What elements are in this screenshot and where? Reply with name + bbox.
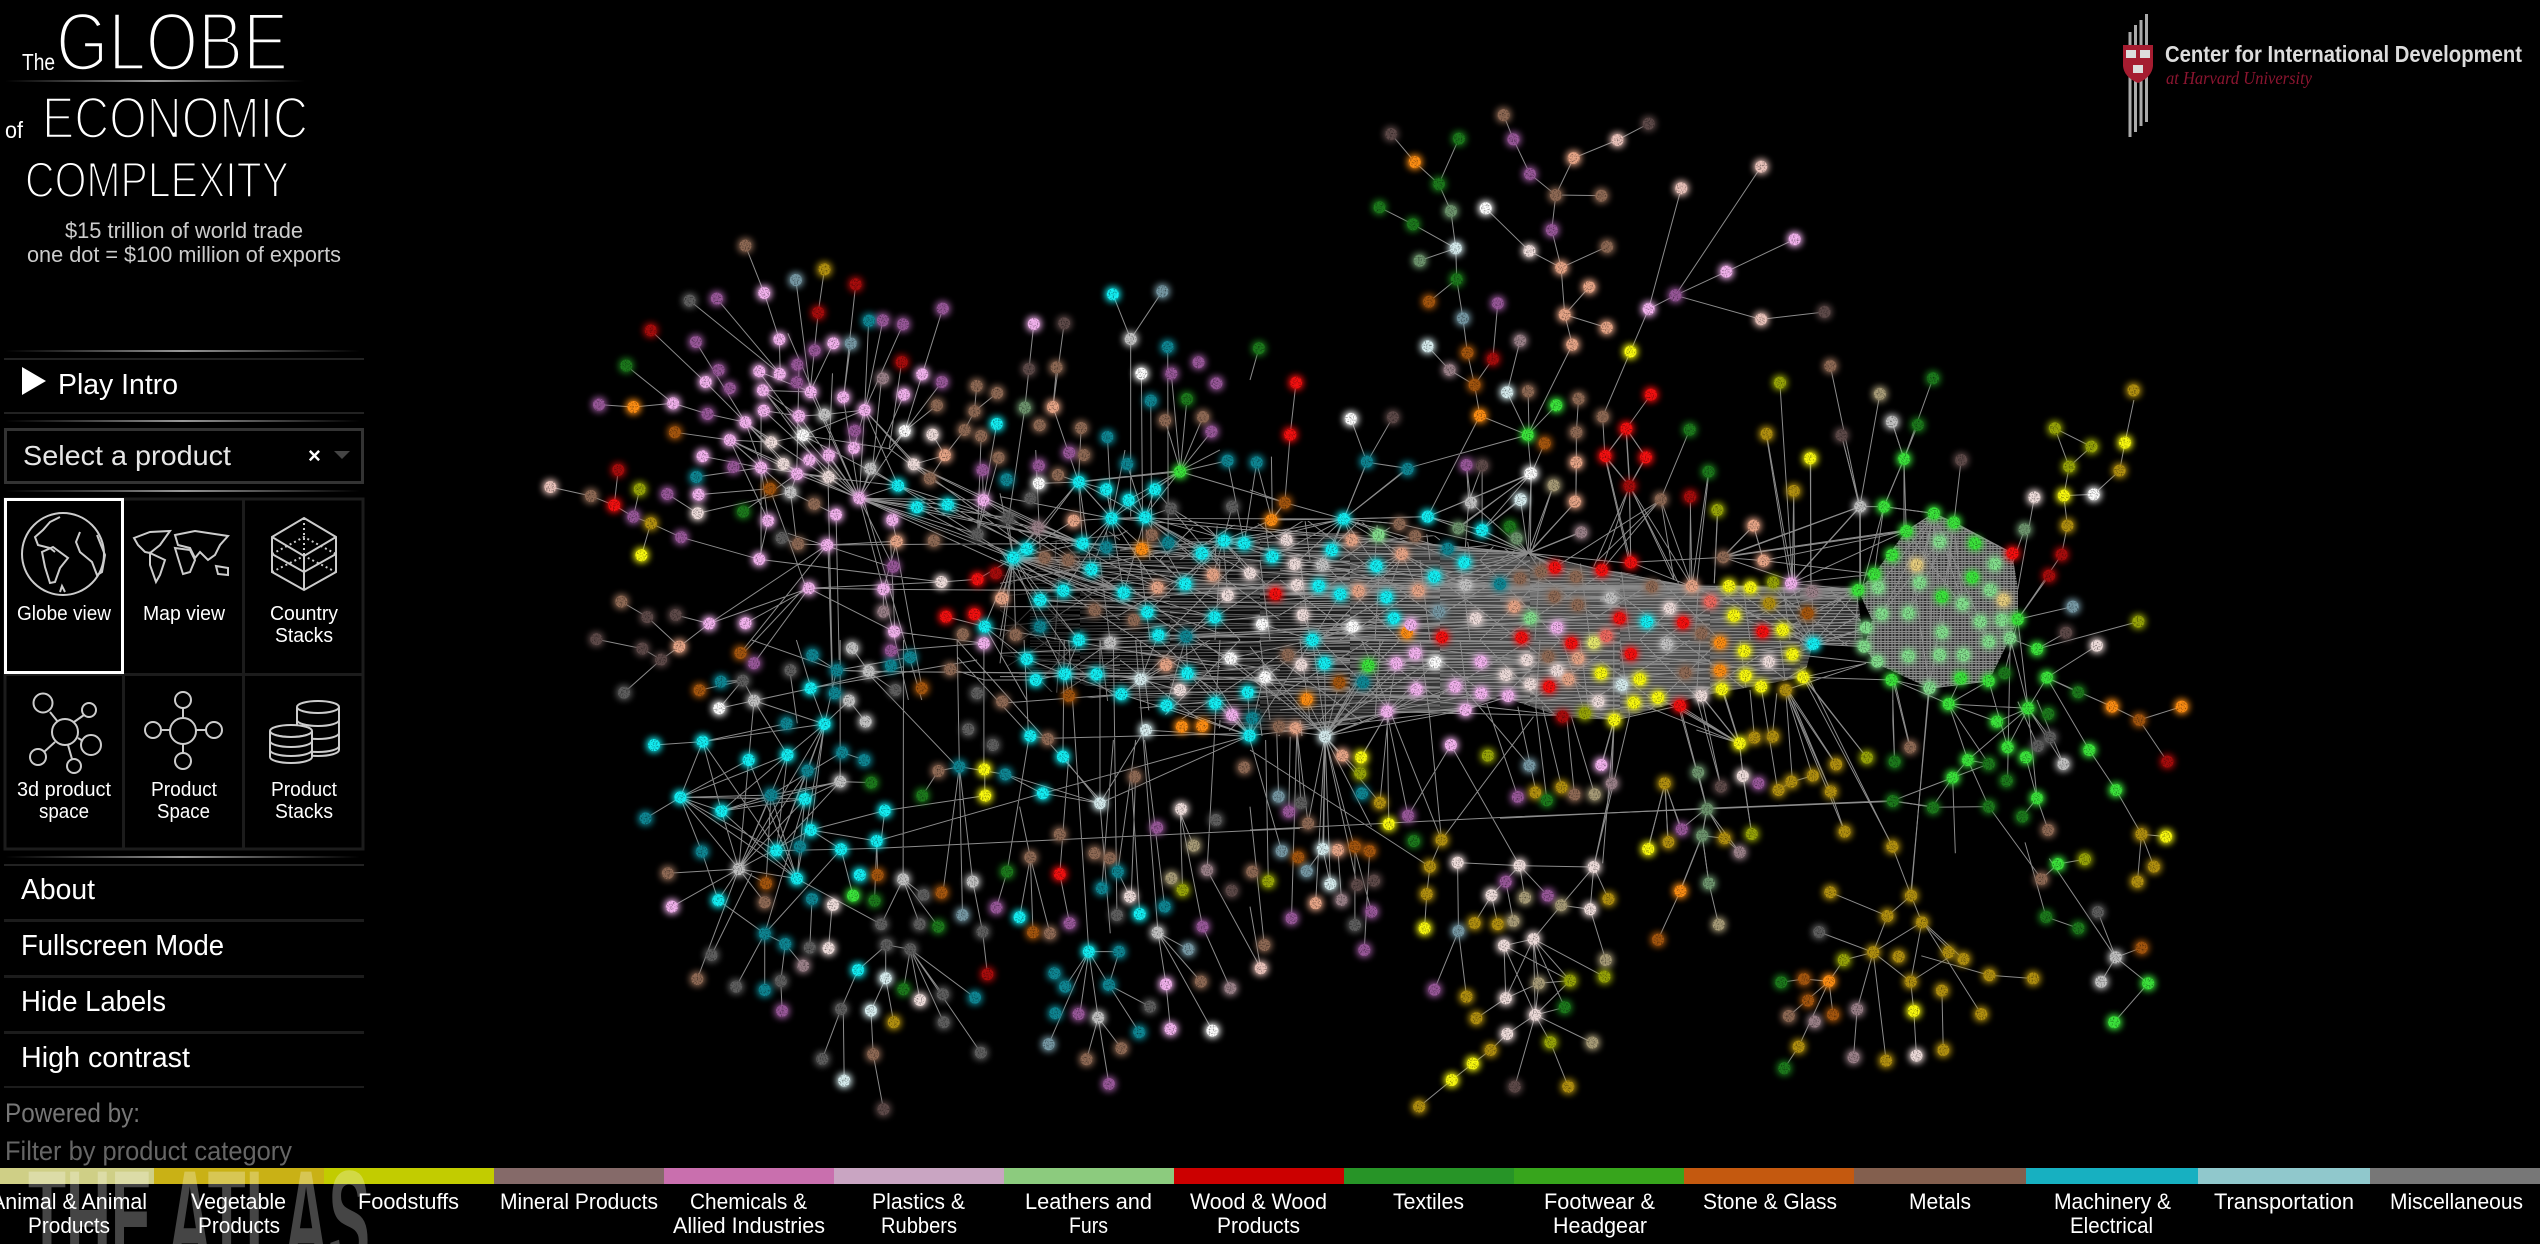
logo shield [2123,45,2153,83]
category labels: Chemicals & [690,1189,807,1214]
subtitle: $15 trillion of world trade [65,218,303,243]
category labels: Foodstuffs [358,1189,459,1214]
title: COMPLEXITY [25,152,289,208]
view: 3d product space: 3d product [17,779,111,801]
nodes: lower centre trees [1252,737,1949,1107]
menu: about: About [21,874,95,906]
category labels: Allied Industries [673,1213,825,1238]
menu: hide labels: Hide Labels [21,986,166,1018]
nodes [550,115,2182,1109]
selected view: globe [6,500,122,672]
title: ECONOMIC [42,86,308,151]
nodes: lower right tree [1963,390,2148,1022]
filter label: Filter by product category [5,1136,292,1166]
view selector grid [5,499,363,849]
nodes: central core [1002,453,1531,730]
button: play intro: Play Intro [58,369,178,401]
view: country stacks: Stacks [275,625,333,647]
category labels: Rubbers [881,1213,957,1238]
view: product space: Product [151,779,217,801]
links: yellow and green region [1500,400,2182,894]
category labels: Metals [1909,1189,1971,1214]
selected view: globe: Globe view [17,603,112,625]
colour bar [0,1168,2540,1184]
nodes: top tree [1259,115,1933,443]
select: product: Select a product [23,440,231,471]
logo: Center for International Development [2123,14,2522,137]
dense link cluster: machinery core [1858,513,2018,688]
category labels: Leathers and [1025,1189,1152,1214]
category labels: Products [198,1213,280,1238]
category labels: Electrical [2070,1213,2153,1238]
dense link band: central core [1000,519,1864,736]
view: product stacks: Stacks [275,801,333,823]
links: central hubs [1000,450,1692,736]
nodes: lower left cluster [646,701,1250,1109]
category labels: Plastics & [872,1189,965,1214]
category labels: Machinery & [2054,1189,2171,1214]
category labels: Vegetable [191,1189,286,1214]
view: product space: Space [157,801,210,823]
logo subtitle: at Harvard University [2166,68,2312,88]
select: product [6,430,362,482]
logo bars [2130,14,2146,137]
title [5,0,308,208]
view: country stacks [270,518,338,647]
category labels: Miscellaneous [2390,1189,2523,1214]
category labels: Wood & Wood [1190,1189,1327,1214]
links: lower left cluster [646,640,1300,1109]
category labels: Stone & Glass [1703,1189,1837,1214]
category labels: Textiles [1393,1189,1464,1214]
links: top tree [1250,115,1933,593]
category labels [0,1189,2523,1238]
category labels: Mineral Products [500,1189,658,1214]
category labels: Footwear & [1544,1189,1655,1214]
category labels: Transportation [2214,1189,2354,1214]
subtitle [27,218,341,267]
subtitle: one dot = $100 million of exports [27,242,341,267]
title: of [5,117,24,143]
title: The [22,49,55,75]
view: product space [145,692,222,823]
category labels: Furs [1069,1213,1108,1238]
view: map: Map view [143,603,226,625]
nodes: yellow band and green cluster [1506,428,2182,882]
category labels: Headgear [1553,1213,1647,1238]
links: lower centre trees [1250,640,1950,1107]
category labels: Products [28,1213,110,1238]
category legend [0,1141,2540,1244]
view: 3d product space: space [39,801,89,823]
links: lower right tree [1921,842,2148,1022]
powered by label: Powered by: [5,1098,140,1128]
sidebar [4,0,364,1166]
category labels: Products [1217,1213,1300,1238]
network graph: product space [550,115,2182,1109]
links: left cluster [550,246,1220,700]
view: product stacks [270,701,339,823]
view: country stacks: Country [270,603,338,625]
menu: high contrast: High contrast [21,1042,190,1074]
view: product stacks: Product [271,779,337,801]
menu: fullscreen mode: Fullscreen Mode [21,930,224,962]
view: map [134,531,228,625]
select: product: × [308,443,321,468]
nodes: left cluster [550,246,1216,693]
view: 3d product space [17,694,111,823]
